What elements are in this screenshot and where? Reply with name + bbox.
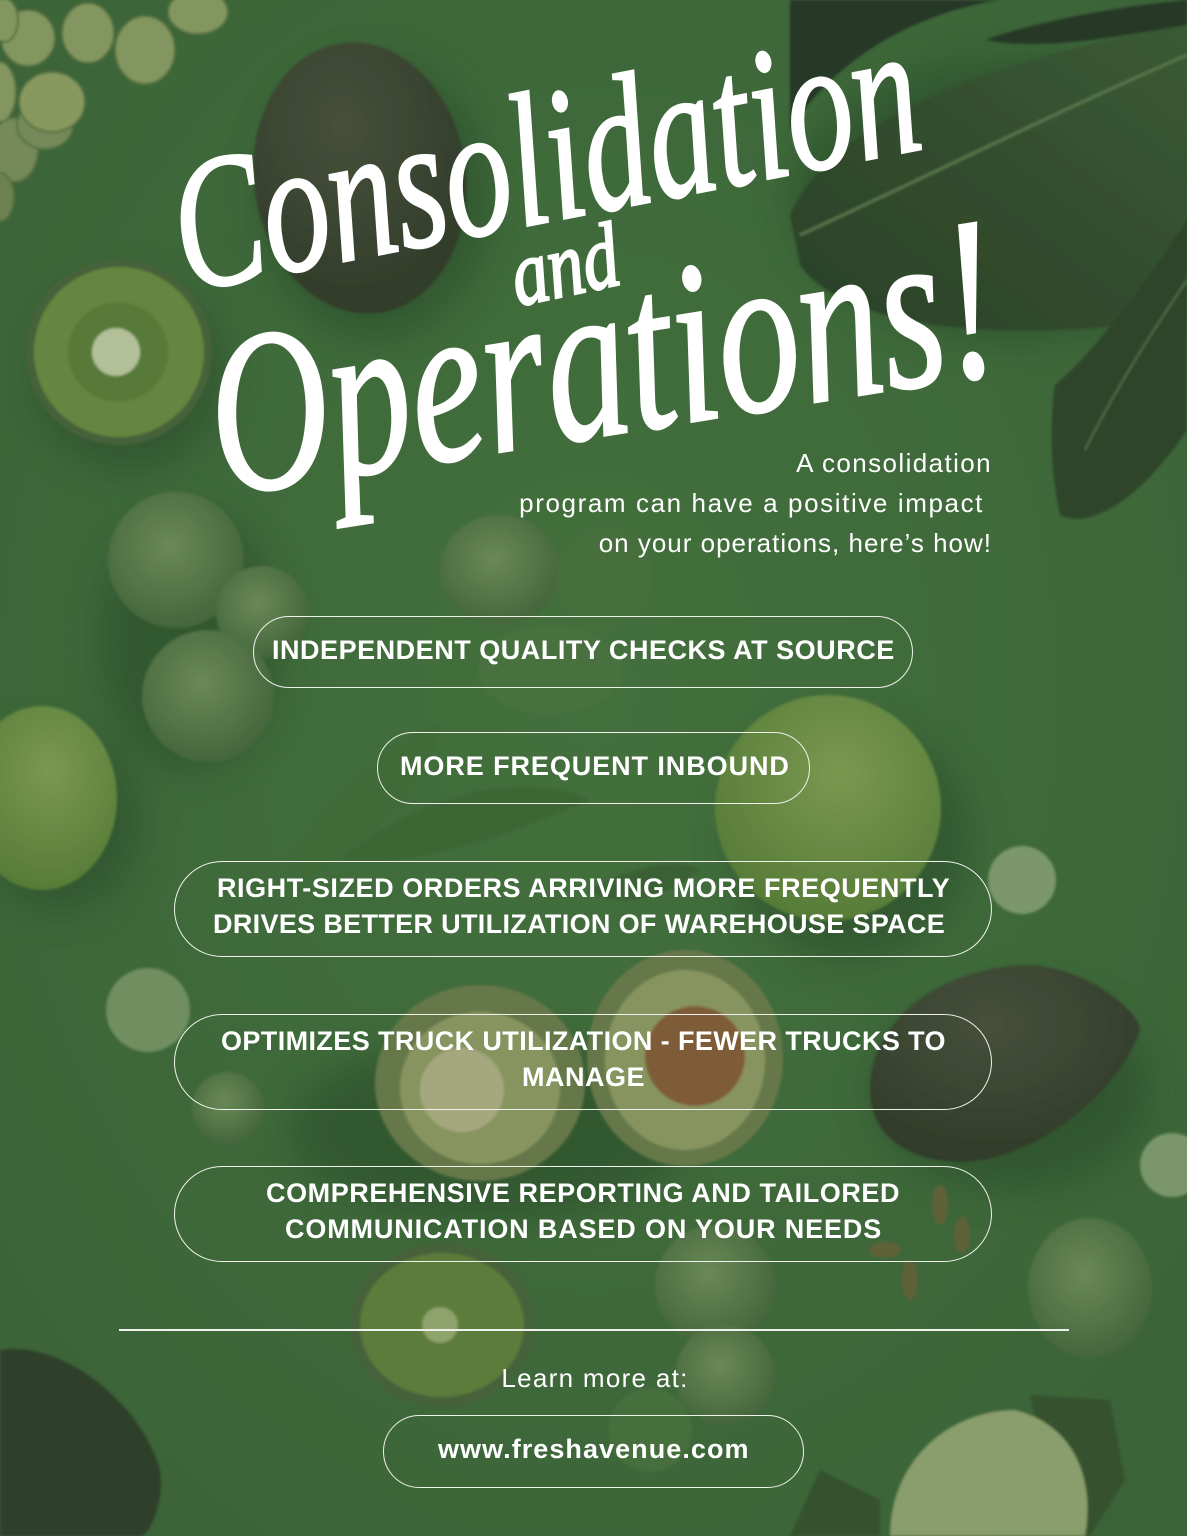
pill text: inbound: MORE FREQUENT INBOUND [400,751,790,781]
intro text: program can have a positive impact [519,488,984,518]
divider line [119,1329,1069,1331]
feijoa right [1028,1218,1152,1358]
pill text: reporting: COMMUNICATION BASED ON YOUR NEEDS [285,1214,882,1244]
pill text: right-sized orders [213,873,950,939]
leaves top right [790,25,1187,331]
small sprouts [988,846,1056,914]
pill text: truck utilization [221,1026,946,1092]
pill: quality checks [253,616,913,688]
pill text: quality checks: INDEPENDENT QUALITY CHECKS AT SOURCE [272,635,895,665]
avocado top [236,29,484,327]
learn more text: Learn more at: [501,1363,689,1393]
title: and: and [501,203,629,326]
kiwi bottom [350,1243,534,1407]
grapes [0,0,228,221]
pill text: truck utilization: OPTIMIZES TRUCK UTILIZATION - FEWER TRUCKS TO [221,1026,946,1056]
sprouts [108,492,244,628]
pill: inbound [377,732,810,804]
intro text [519,448,992,558]
pill: reporting [174,1166,992,1262]
pill: right-sized orders [174,861,992,957]
pill text: right-sized orders: DRIVES BETTER UTILIZATION OF WAREHOUSE SPACE [213,909,945,939]
apple [715,695,941,921]
pill text: reporting: COMPREHENSIVE REPORTING AND TAILORED [266,1178,900,1208]
intro text: A consolidation [796,448,992,478]
lime [0,706,117,890]
broccoli [0,1349,161,1536]
pill text: truck utilization: MANAGE [522,1062,645,1092]
pea pods [290,725,440,880]
pill text: right-sized orders: RIGHT-SIZED ORDERS ARRIVING MORE FREQUENTLY [217,873,950,903]
intro text: on your operations, here’s how! [599,528,992,558]
seeds [869,1185,970,1300]
pill text: reporting [266,1178,900,1244]
website url: www.freshavenue.com [438,1434,750,1464]
avocado halves [375,985,585,1181]
kiwi [26,259,212,445]
avocado right [870,966,1140,1162]
pill: truck utilization [174,1014,992,1110]
cauliflower [790,1395,1125,1536]
pill: website [383,1415,804,1488]
